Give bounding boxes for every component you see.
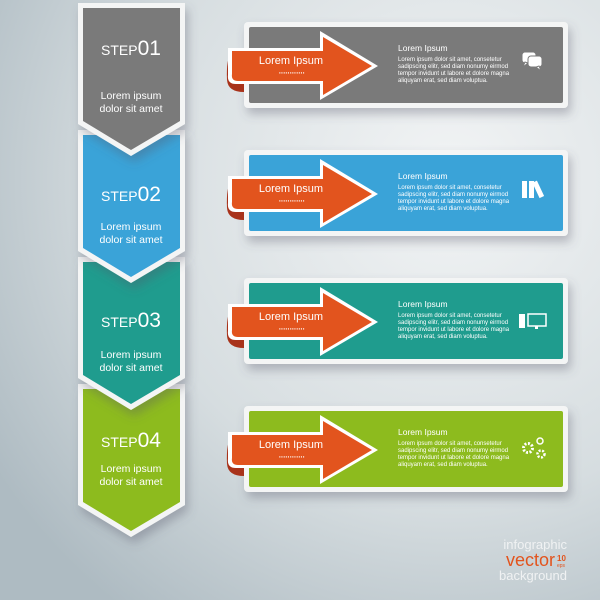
watermark: vector [506, 550, 555, 570]
arrow ribbon [227, 415, 378, 484]
step 02 [78, 130, 185, 283]
banner 3 [227, 278, 568, 364]
text: Lorem Ipsum [398, 427, 448, 437]
arrow ribbon [227, 31, 378, 100]
watermark [499, 537, 567, 583]
arrow ribbon: ············ [278, 451, 305, 463]
step 03: STEP03 [101, 309, 161, 332]
text: sadipscing elitr, sed diam nonumy eirmod [398, 64, 508, 70]
step 01: Lorem ipsum [101, 90, 162, 102]
text: Lorem Ipsum [398, 43, 448, 53]
text: Lorem Ipsum [398, 171, 448, 181]
step 04 [78, 384, 185, 537]
text: sadipscing elitr, sed diam nonumy eirmod [398, 448, 508, 454]
text: Lorem Ipsum [398, 299, 448, 309]
text: sadipscing elitr, sed diam nonumy eirmod [398, 192, 508, 198]
text: aliquyam erat, sed diam voluptua. [398, 334, 488, 340]
banner 1 [227, 22, 568, 108]
step 03: Lorem ipsum [101, 349, 162, 361]
text: tempor invidunt ut labore et dolore magna [398, 327, 510, 333]
arrow ribbon: Lorem Ipsum [259, 183, 323, 195]
watermark: eps [557, 563, 566, 569]
text: sadipscing elitr, sed diam nonumy eirmod [398, 320, 508, 326]
icon: computer [519, 314, 546, 329]
text: aliquyam erat, sed diam voluptua. [398, 206, 488, 212]
arrow ribbon [227, 159, 378, 228]
step 02: Lorem ipsum [101, 221, 162, 233]
arrow ribbon: Lorem Ipsum [259, 55, 323, 67]
step 02: dolor sit amet [99, 234, 163, 246]
arrow ribbon: Lorem Ipsum [259, 311, 323, 323]
text: tempor invidunt ut labore et dolore magna [398, 71, 510, 77]
step 04: STEP04 [101, 429, 161, 452]
arrow ribbon [227, 287, 378, 356]
banner 4 [227, 406, 568, 492]
watermark: background [499, 568, 567, 583]
text [398, 427, 510, 468]
text [398, 299, 510, 340]
text: Lorem ipsum dolor sit amet, consetetur [398, 313, 502, 319]
text: aliquyam erat, sed diam voluptua. [398, 78, 488, 84]
icon: gears [524, 438, 544, 458]
text: Lorem ipsum dolor sit amet, consetetur [398, 441, 502, 447]
banner 2 [227, 150, 568, 236]
step 01 [78, 3, 185, 156]
text: tempor invidunt ut labore et dolore magna [398, 199, 510, 205]
text: Lorem ipsum dolor sit amet, consetetur [398, 185, 502, 191]
text: Lorem ipsum dolor sit amet, consetetur [398, 57, 502, 63]
step 01: STEP01 [101, 37, 161, 60]
arrow ribbon: Lorem Ipsum [259, 439, 323, 451]
arrow ribbon: ············ [278, 323, 305, 335]
step column [78, 3, 185, 537]
text [398, 171, 510, 212]
text [398, 43, 510, 84]
step 02: STEP02 [101, 183, 161, 206]
arrow ribbon: ············ [278, 195, 305, 207]
step 03: dolor sit amet [99, 362, 163, 374]
step 04: Lorem ipsum [101, 463, 162, 475]
watermark: 10 [557, 554, 566, 563]
icon: binders [522, 181, 544, 198]
arrow ribbon: ············ [278, 67, 305, 79]
step 03 [78, 257, 185, 410]
icon: speech bubbles [522, 52, 542, 71]
step 01: dolor sit amet [99, 103, 163, 115]
text: aliquyam erat, sed diam voluptua. [398, 462, 488, 468]
step 04: dolor sit amet [99, 476, 163, 488]
watermark: infographic [503, 537, 567, 552]
text: tempor invidunt ut labore et dolore magna [398, 455, 510, 461]
